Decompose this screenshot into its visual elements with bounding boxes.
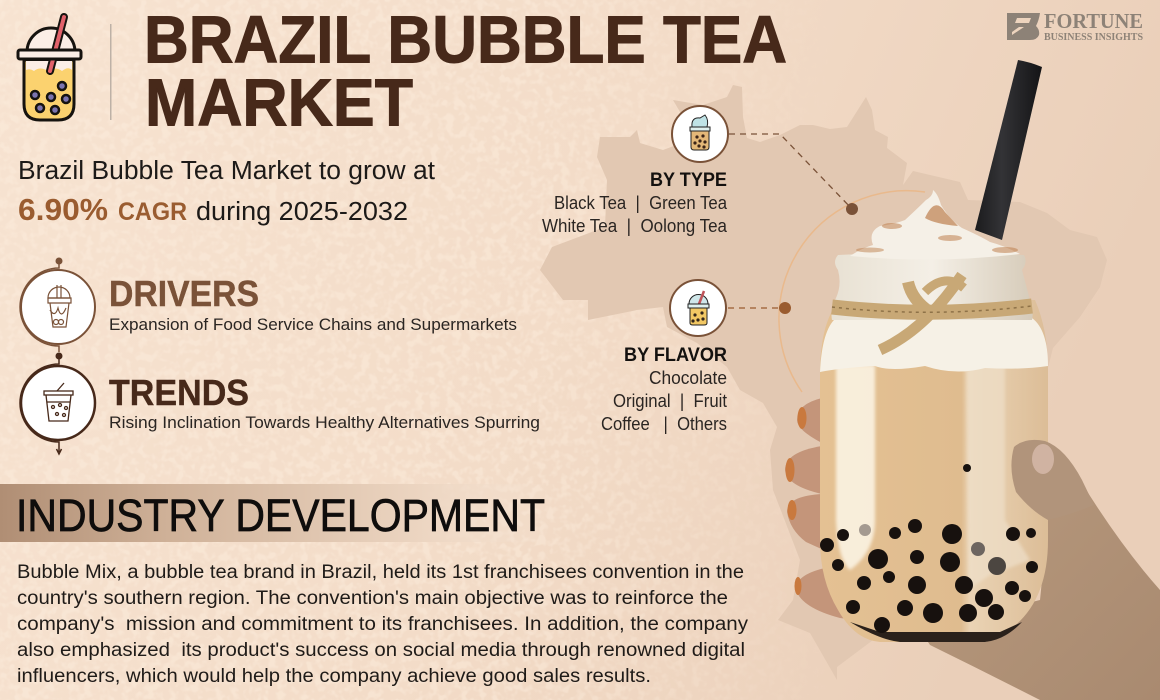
by flavor text: Chocolate [649,368,727,388]
subtitle: CAGR [18,157,435,227]
subtitle: CAGR: CAGR [118,198,187,226]
trends heading: TRENDS [109,372,249,413]
by flavor connector [728,302,791,314]
background [241,0,1160,700]
trends description: Rising Inclination Towards Healthy Alternatives Spurring [109,413,540,432]
thumb [1011,440,1094,520]
icon: by type [672,106,728,162]
thumbnail [1032,444,1054,474]
industry development paragraph [17,562,749,687]
industry development paragraph: country's southern region. The convention's main objective was to reinforce the [17,588,728,609]
industry development paragraph: also emphasized its product's success on social media through renowned digital [17,640,745,661]
by flavor text: Coffee | Others [601,414,727,434]
title [144,2,787,140]
photo: hand holding bubble tea jar [785,60,1160,700]
icon: by flavor [670,280,726,336]
by type text: BY TYPE [650,170,727,191]
map of Brazil [540,85,1107,680]
drivers description: Expansion of Food Service Chains and Supermarkets [109,315,517,334]
industry development paragraph: company's mission and commitment to its franchisees. In addition, the company [17,614,749,635]
straw [975,60,1042,240]
logo: Fortune Business Insights [1007,9,1143,43]
by type text: Black Tea | Green Tea [554,193,728,213]
hand back [920,445,1160,700]
fingers [785,398,870,622]
trends panel [20,353,540,454]
title: BRAZIL BUBBLE TEA [144,2,787,78]
logo: Fortune Business Insights: FORTUNE [1044,9,1143,33]
base dark rim [850,622,1022,642]
by type connector [729,134,858,215]
milk highlight [836,365,875,570]
title divider [110,24,112,120]
industry development paragraph: influencers, which would help the company achieve good sales results. [17,666,651,687]
trends icon [20,353,95,454]
logo: Fortune Business Insights: BUSINESS INSIGHTS [1044,32,1143,43]
subtitle: CAGR: Brazil Bubble Tea Market to grow at [18,157,435,185]
by flavor text [601,345,727,434]
drivers heading: DRIVERS [109,273,259,314]
subtitle: CAGR: during 2025-2032 [196,198,408,226]
jar body [820,300,1048,642]
jar neck [832,252,1033,320]
light tea streak [966,365,1030,590]
foam [820,318,1048,372]
subtitle: CAGR: 6.90% [18,192,108,227]
brand icon: bubble tea cup [18,17,81,120]
drivers panel [20,258,517,352]
whipped cream [850,190,1020,260]
by type text [542,170,728,236]
drivers icon [20,258,95,352]
by flavor text: BY FLAVOR [624,345,727,366]
by flavor text: Original | Fruit [613,391,727,411]
by type text: White Tea | Oolong Tea [542,216,728,236]
boba pearls [820,464,1038,633]
industry development paragraph: Bubble Mix, a bubble tea brand in Brazil, held its 1st franchisees convention in the [17,562,744,583]
twine [832,275,1032,350]
industry development heading band: INDUSTRY DEVELOPMENT [16,490,545,541]
title: MARKET [145,66,413,140]
connector arc [779,191,925,392]
